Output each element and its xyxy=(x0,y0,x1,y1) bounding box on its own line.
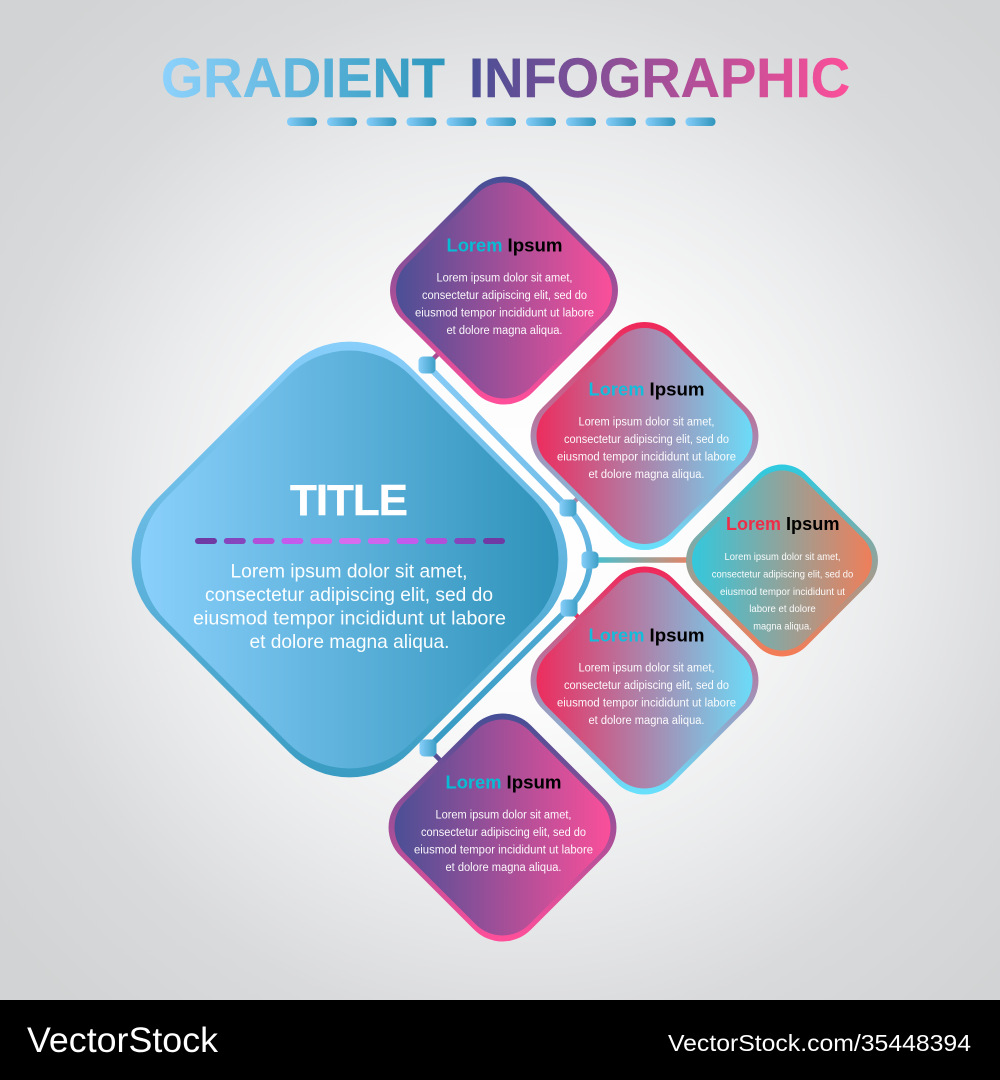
main body text: et dolore magna aliqua. xyxy=(250,631,450,653)
card heading: Ipsum xyxy=(650,380,705,400)
card fill xyxy=(521,312,768,560)
card fill xyxy=(379,704,626,951)
card heading: Ipsum xyxy=(650,626,705,646)
card text xyxy=(415,236,594,337)
card body: eiusmod tempor incididunt ut labore xyxy=(557,698,736,710)
main title: TITLE xyxy=(290,476,408,525)
card heading: Lorem xyxy=(726,514,781,534)
card body: consectetur adipiscing elit, sed do xyxy=(564,680,729,692)
card body: et dolore magna aliqua. xyxy=(446,862,562,874)
connector wiring xyxy=(427,347,692,766)
main body text: consectetur adipiscing elit, sed do xyxy=(205,584,493,606)
card border xyxy=(514,550,775,811)
card heading xyxy=(588,380,704,400)
card fill xyxy=(380,167,628,414)
card text xyxy=(557,380,736,481)
card heading: Lorem xyxy=(446,236,502,256)
card heading xyxy=(588,626,704,646)
card body: consectetur adipiscing elit, sed do xyxy=(422,290,587,302)
card heading: Ipsum xyxy=(508,236,563,256)
connector: main arc linking the nodes xyxy=(427,365,590,748)
card heading: Ipsum xyxy=(786,514,840,534)
connector stub to upper card xyxy=(568,494,582,508)
main body text: Lorem ipsum dolor sit amet, xyxy=(230,560,468,582)
card body xyxy=(415,272,594,337)
card heading: Lorem xyxy=(588,380,644,400)
card body: consectetur adipiscing elit, sed do xyxy=(712,568,853,580)
panel: main title diamond xyxy=(96,306,603,813)
card body: Lorem ipsum dolor sit amet, xyxy=(578,416,714,428)
card body: magna aliqua. xyxy=(753,620,812,632)
connector stub to lower card xyxy=(569,608,583,622)
panel: bottom card xyxy=(372,697,633,958)
heading word: gradient: GRADIENT xyxy=(161,46,445,109)
card body: Lorem ipsum dolor sit amet, xyxy=(436,810,572,822)
card body: et dolore magna aliqua. xyxy=(588,715,704,727)
card body xyxy=(557,662,736,727)
card body: labore et dolore xyxy=(749,603,816,615)
main diamond border xyxy=(96,306,603,813)
connector stub to top card xyxy=(427,347,445,365)
footer bar xyxy=(0,1000,1000,1080)
main body text xyxy=(193,560,506,653)
card body xyxy=(557,416,736,481)
card body xyxy=(414,810,593,874)
card border xyxy=(514,305,775,567)
heading dashed underline xyxy=(287,118,716,126)
main dashed divider xyxy=(195,538,505,544)
card border xyxy=(372,697,633,958)
card body: eiusmod tempor incididunt ut xyxy=(720,586,845,598)
card body xyxy=(712,551,853,632)
card heading xyxy=(446,236,562,256)
card body: et dolore magna aliqua. xyxy=(588,469,704,481)
panel: upper right card xyxy=(514,305,775,567)
connector stub to right card xyxy=(590,557,692,563)
card border xyxy=(672,450,892,671)
footer brand: VectorStock xyxy=(27,1021,219,1060)
card heading: Lorem xyxy=(588,626,644,646)
card border xyxy=(373,160,635,421)
card body: Lorem ipsum dolor sit amet, xyxy=(436,272,572,284)
card body: eiusmod tempor incididunt ut labore xyxy=(414,844,593,856)
connector nodes xyxy=(418,356,598,756)
panel: lower right card xyxy=(514,550,775,811)
footer url: VectorStock.com/35448394 xyxy=(668,1030,971,1056)
card body: consectetur adipiscing elit, sed do xyxy=(421,827,586,839)
card body: Lorem ipsum dolor sit amet, xyxy=(578,662,714,674)
card body: Lorem ipsum dolor sit amet, xyxy=(724,551,840,563)
card body: et dolore magna aliqua. xyxy=(446,325,562,337)
main diamond fill xyxy=(104,314,595,805)
card heading: Ipsum xyxy=(506,772,562,792)
main heading xyxy=(161,46,850,109)
card text xyxy=(414,772,593,874)
panel: top card xyxy=(373,160,635,421)
card heading: Lorem xyxy=(446,772,501,792)
footer background xyxy=(0,1000,1000,1080)
connector stub to bottom card xyxy=(428,748,446,766)
panel: right card xyxy=(672,450,892,671)
card body: eiusmod tempor incididunt ut labore xyxy=(557,452,736,464)
card body: consectetur adipiscing elit, sed do xyxy=(564,434,729,446)
card heading xyxy=(446,772,562,792)
card heading xyxy=(726,514,840,534)
main body text: eiusmod tempor incididunt ut labore xyxy=(193,608,506,630)
heading word: infographic: INFOGRAPHIC xyxy=(469,46,850,109)
card fill xyxy=(521,557,768,804)
card body: eiusmod tempor incididunt ut labore xyxy=(415,308,594,320)
card fill xyxy=(679,457,885,664)
card text xyxy=(557,626,736,727)
